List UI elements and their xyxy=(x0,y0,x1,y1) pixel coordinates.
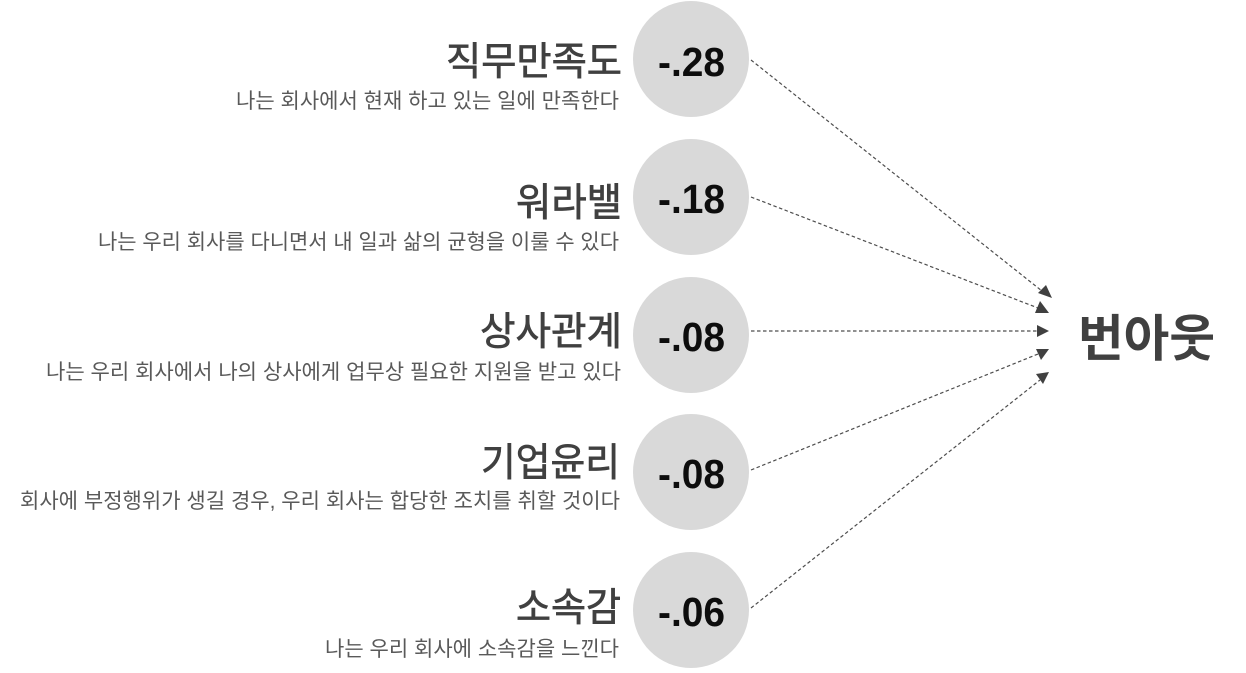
description: supervisor relations: 나는 우리 회사에서 나의 상사에게 업무상 필요한 지원을 받고 있다 xyxy=(46,361,621,384)
panel: supervisor relations xyxy=(46,277,749,393)
value: belonging: -.06 xyxy=(658,589,725,635)
heading: job satisfaction: 직무만족도 xyxy=(446,41,622,84)
value: job satisfaction: -.28 xyxy=(658,39,725,85)
value: corporate ethics: -.08 xyxy=(658,451,725,497)
panel: belonging xyxy=(325,552,749,668)
arrow: supervisor relations to burnout xyxy=(751,325,1049,337)
circle: corporate ethics coefficient xyxy=(633,414,749,530)
arrow: job satisfaction to burnout xyxy=(751,60,1052,298)
heading: belonging: 소속감 xyxy=(516,587,621,630)
description: work-life balance: 나는 우리 회사를 다니면서 내 일과 삶의 균형을 이룰 수 있다 xyxy=(98,231,619,254)
arrow: work-life balance to burnout xyxy=(751,197,1049,313)
circle: job satisfaction coefficient xyxy=(633,1,749,117)
panel: job satisfaction xyxy=(236,1,749,117)
description: belonging: 나는 우리 회사에 소속감을 느낀다 xyxy=(325,638,619,661)
outcome label: burnout: 번아웃 xyxy=(1078,311,1215,367)
value: supervisor relations: -.08 xyxy=(658,314,725,360)
arrow: belonging to burnout xyxy=(751,372,1049,608)
circle: work-life balance coefficient xyxy=(633,139,749,255)
circle: supervisor relations coefficient xyxy=(633,277,749,393)
value: work-life balance: -.18 xyxy=(658,176,725,222)
heading: work-life balance: 워라밸 xyxy=(516,182,622,225)
heading: supervisor relations: 상사관계 xyxy=(480,311,622,354)
heading: corporate ethics: 기업윤리 xyxy=(481,442,620,485)
description: job satisfaction: 나는 회사에서 현재 하고 있는 일에 만족한다 xyxy=(236,90,619,113)
circle: belonging coefficient xyxy=(633,552,749,668)
panel: corporate ethics xyxy=(20,414,749,530)
arrow: corporate ethics to burnout xyxy=(751,349,1049,470)
panel: work-life balance xyxy=(98,139,749,255)
description: corporate ethics: 회사에 부정행위가 생길 경우, 우리 회사는 합당한 조치를 취할 것이다 xyxy=(20,490,620,513)
